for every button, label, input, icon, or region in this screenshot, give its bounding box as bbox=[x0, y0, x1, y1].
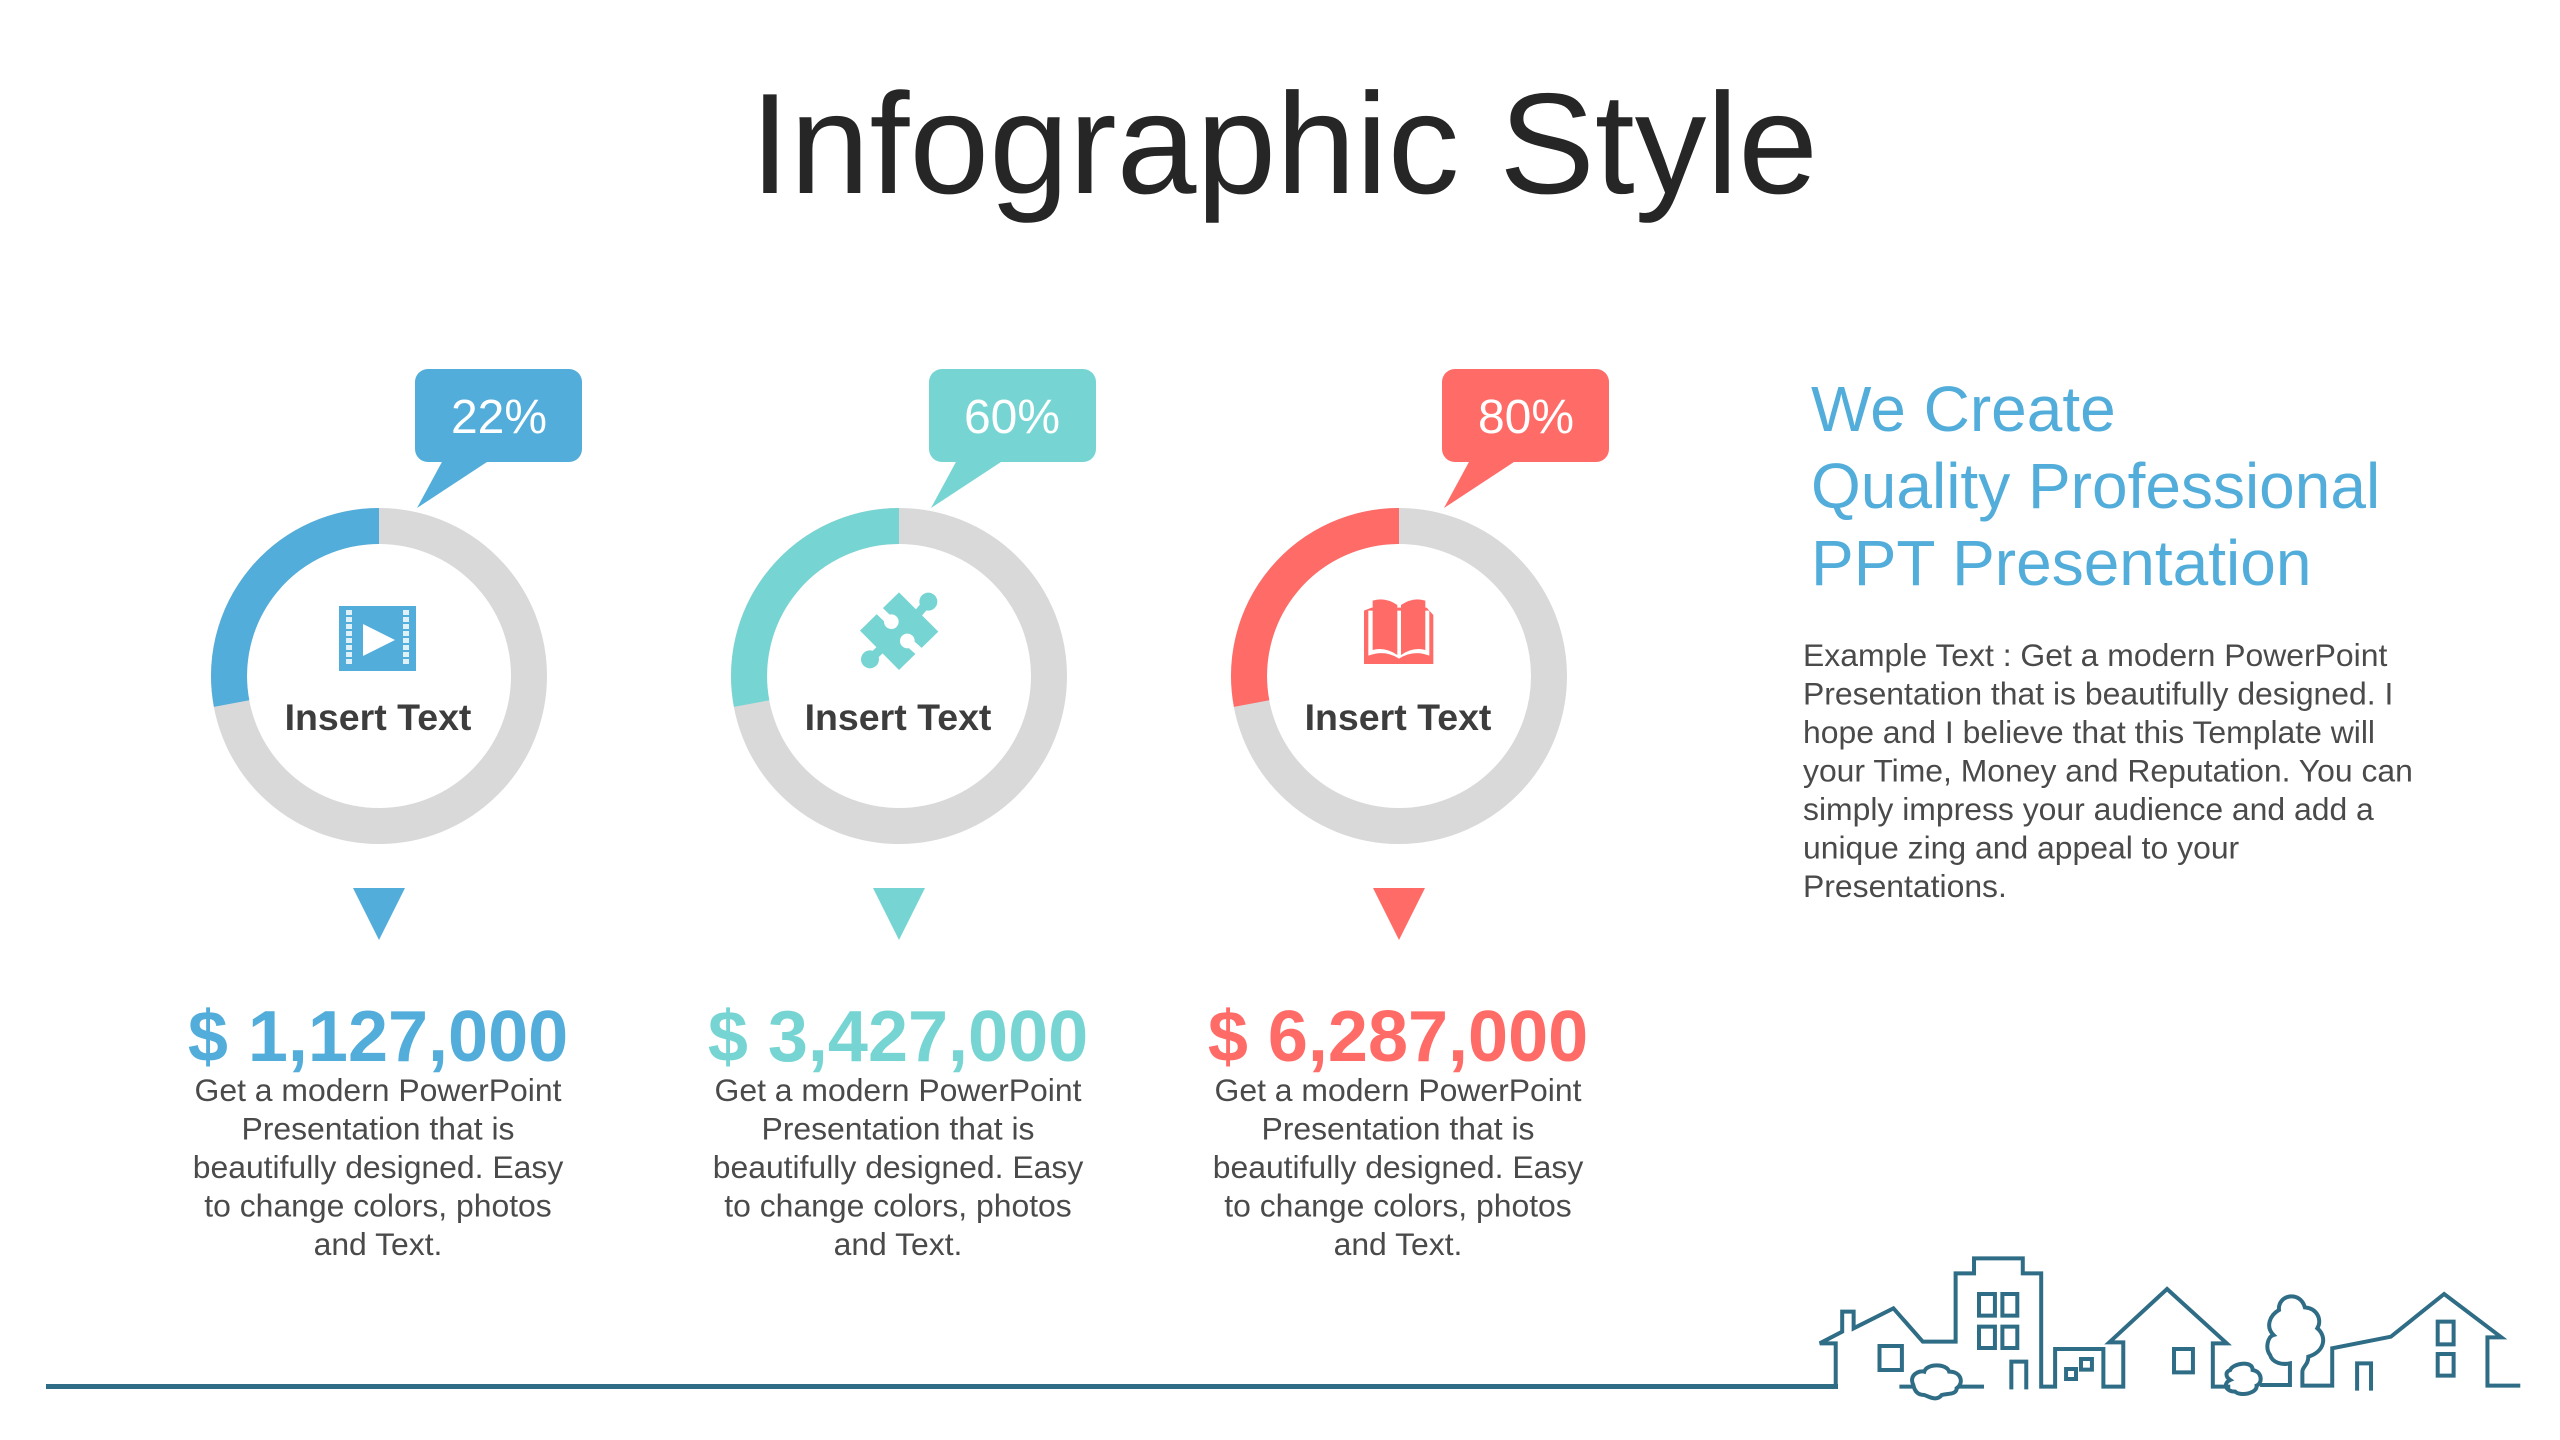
amount: $ 3,427,000 bbox=[708, 997, 1088, 1077]
text block: beautifully designed. Easy bbox=[193, 1149, 563, 1185]
callout: 60% bbox=[929, 369, 1096, 508]
amount: $ 6,287,000 bbox=[1208, 997, 1588, 1077]
text block: to change colors, photos bbox=[1224, 1188, 1572, 1224]
text block: Get a modern PowerPoint bbox=[715, 1072, 1082, 1108]
text block: Get a modern PowerPoint bbox=[1215, 1072, 1582, 1108]
amount: $ 1,127,000 bbox=[188, 997, 568, 1077]
text block: Presentation that is bbox=[1261, 1110, 1535, 1146]
text block: example text: simply impress your audience and add a bbox=[1803, 791, 2374, 827]
text block: example text: Example Text : Get a modern PowerPoint bbox=[1803, 637, 2387, 673]
text block: example text: Presentation that is beautifully designed. I bbox=[1803, 676, 2393, 712]
donut chart: red bbox=[1249, 526, 1549, 826]
text block: Get a modern PowerPoint bbox=[195, 1072, 562, 1108]
panel: column 3 red bbox=[1208, 369, 1609, 1262]
heading: we create: PPT Presentation bbox=[1811, 527, 2311, 599]
text block: to change colors, photos bbox=[724, 1188, 1072, 1224]
callout: 60%: 60% bbox=[964, 391, 1060, 444]
arrow: down bbox=[1373, 888, 1425, 940]
panel: column 1 blue bbox=[188, 369, 582, 1262]
text block: example text: your Time, Money and Reputation. You can bbox=[1803, 752, 2413, 788]
text block: example text: Presentations. bbox=[1803, 868, 2007, 904]
text block: and Text. bbox=[314, 1226, 442, 1262]
donut chart: blue bbox=[229, 526, 529, 826]
panel: column 2 teal bbox=[708, 369, 1096, 1262]
text block: and Text. bbox=[1334, 1226, 1462, 1262]
callout: 80%: 80% bbox=[1478, 391, 1574, 444]
callout: 22% bbox=[415, 369, 582, 508]
text block: Presentation that is bbox=[761, 1110, 1035, 1146]
heading: we create: We Create bbox=[1811, 373, 2116, 445]
title: Infographic Style bbox=[750, 64, 1818, 224]
callout: 22%: 22% bbox=[451, 391, 547, 444]
icon: film play bbox=[339, 606, 416, 671]
text block: and Text. bbox=[834, 1226, 962, 1262]
label: Insert Text bbox=[1305, 696, 1492, 738]
text block: example text: hope and I believe that this Template will bbox=[1803, 714, 2375, 750]
text block: example text: unique zing and appeal to your bbox=[1803, 830, 2240, 866]
text block: Presentation that is bbox=[241, 1110, 515, 1146]
text block: to change colors, photos bbox=[204, 1188, 552, 1224]
ground line bbox=[46, 1384, 1838, 1389]
text block: beautifully designed. Easy bbox=[1213, 1149, 1583, 1185]
arrow: down bbox=[353, 888, 405, 940]
arrow: down bbox=[873, 888, 925, 940]
icon: open book bbox=[1364, 599, 1433, 664]
callout: 80% bbox=[1442, 369, 1609, 508]
icon: puzzle piece bbox=[860, 592, 938, 670]
label: Insert Text bbox=[805, 696, 992, 738]
label: Insert Text bbox=[285, 696, 472, 738]
donut chart: teal bbox=[749, 526, 1049, 826]
icon: town skyline bbox=[1820, 1258, 2520, 1398]
text block: beautifully designed. Easy bbox=[713, 1149, 1083, 1185]
heading: we create: Quality Professional bbox=[1811, 450, 2380, 522]
